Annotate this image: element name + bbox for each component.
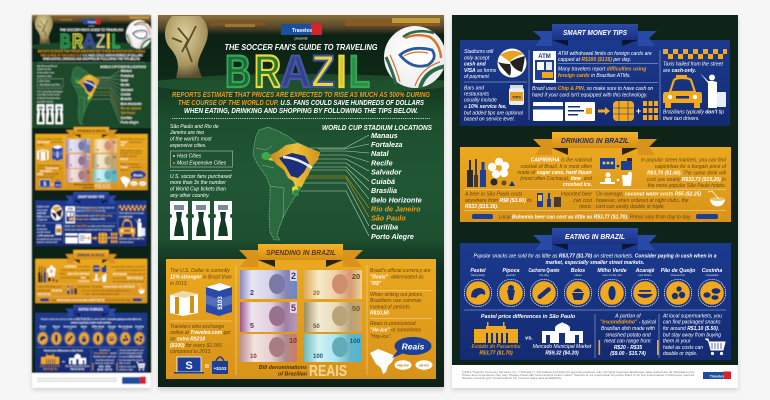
bill: 2 reais: 2 [291,271,296,281]
thumbnail: header [29,15,154,63]
text: service fee: usually include [464,98,497,104]
text: escondidinho: meat can range from: [604,338,652,344]
text: supermarkets: At local supermarkets, you [662,314,722,320]
text: reais facts: "Hay-ice". [370,334,392,340]
text: supermarkets: can find packaged snacks [663,320,721,326]
icon: Brazil silhouette with speech bubbles: He-Ice [419,364,429,368]
ribbon: eating heading [533,228,657,250]
text: beer prices: anywhere from R$8 ($3.60) to [465,198,532,204]
map: South America with Brazil flag [253,127,320,240]
text: ticket stat: any other country. [170,193,210,199]
text: pacaembu price: R$3,77 ($1.70) [479,350,513,356]
text: cash and visa: Stadiums will [464,49,494,55]
text: taxis cash only [663,62,723,74]
bill: 2 reais [240,270,297,299]
icon: tip jar: TIPS [512,94,521,100]
text: expensive cities: Janeiro are two [169,130,204,136]
title: BRAZIL: L [349,46,370,97]
text: service fee: Bars and [464,86,484,92]
text: beer prices: A beer in São Paulo costs [464,192,523,198]
icon: stadium ball [498,48,526,78]
text: dollar strength: in 2013. [170,281,188,287]
text: ticket stat: U.S. soccer fans purchased [170,174,232,180]
text: street market prices: the more popular São Paulo hotels. [648,183,726,189]
icon: laptop equals money bag: = [205,362,210,371]
labels: snack translations: cheese bun [671,273,686,277]
text: cash and visa: of payment. [464,74,490,80]
text: coconut water: cost can easily double or triple. [596,204,665,210]
ribbon: spending heading: SPENDING IN BRAZIL [266,250,336,257]
text: exchange online [170,324,231,355]
text: escondidinho: "escondidinho" - typical [600,320,657,326]
panel: right poster [452,15,738,388]
text: coconut water: however, when ordered at night clubs, the [596,198,689,204]
text: reais facts: instead of periods: [370,304,411,310]
bill: 50 reais: 50 [352,304,360,313]
text: supermarkets: double or triple. [663,351,697,357]
text: ATM tips: capped at R$300 ($135) per day. [558,57,631,63]
title: BRAZIL: B [225,46,251,97]
text: ticket stat: more than 3x the number [170,180,226,186]
text: cash and visa: only accept [464,56,490,62]
text: snacks intro: market, especially smaller street markets. [546,260,644,266]
thumbnail background [32,15,151,388]
logo: Travelex: presents [294,36,308,40]
bill: 5 reais: 5 [250,323,254,330]
stadium crowd band [151,15,451,94]
text: reais facts: Reais is pronounced [370,321,416,327]
intro text [172,90,430,115]
panel: drinking background [460,147,731,222]
list: stadium cities: Belo Horizonte [371,196,422,204]
labels: snack names: Coxinha [702,268,722,274]
caption: bill denominations [259,363,347,380]
text: dollar strength: 11% stronger in Brazil than [170,274,232,280]
labels: snack names: Pão de Queijo [661,268,695,274]
thumbnail: drinking [35,250,147,303]
intro text: REPORTS ESTIMATE THAT PRICES ARE EXPECTED TO RISE AS MUCH AS 500% DURING [172,90,430,99]
text: street market prices: cost you nearly R$33,73 ($15,20) in [647,177,726,183]
labels: snack names [470,268,722,274]
text: exchange online: online at Travelex.com get [170,330,231,336]
labels: snack names: Pastel [470,268,486,274]
chart heading: pastel price differences: Pastel price differences in São Paulo [481,314,576,320]
bill: 50 reais [304,302,362,332]
section: smart money tips [460,24,730,126]
text: reais facts: R$10,50 [370,310,389,316]
bill: 20 reais: 20 [352,272,360,281]
text: reais facts: "Reais", abbreviated as [370,274,424,280]
text: chip and pin [532,86,653,98]
text: service fee: based on service level. [464,116,515,122]
text: reais facts: When writing out prices, [370,292,423,298]
text: mercado price: R$9,32 ($4.20) [545,350,579,356]
text: ticket stat: of World Cup tickets than [170,186,226,192]
legend [170,151,232,167]
text: taxis cash only: Taxis hailed from the street [663,62,723,68]
labels: snack translations: corn on the cob [602,273,622,277]
labels: snack names: Acarajé [635,268,654,274]
icon: beer [537,193,561,207]
bill: 100 reais: 100 [350,338,361,345]
title: BRAZIL [225,46,370,97]
callout: Bohemia beer: Local Bohemia beer can cost as little as R$3,77 ($1.70). Prices vary from day to day. [499,214,691,220]
bill: 5 reais [240,302,297,332]
text: legal notice: ©2013 Travelex Currency Services, Inc. ("Travelex"). Information provided for general purposes only. All rights reserved. Exchange rates quoted are for illustration only. [462,371,696,374]
panel: spending background [166,259,436,379]
text: coconut water [596,192,701,210]
icon: money stacks [170,283,232,316]
text: exchange online: ($100) for every $1,000 [170,343,222,349]
bill: 10 reais: 10 [250,354,257,360]
text: cash and visa: VISA as forms [464,68,497,74]
list: stadium cities [371,131,422,241]
labels: snack translations: hot dog [539,273,549,277]
ribbon: money heading [533,24,657,46]
text: street market prices: R$3,70 ($1,68). The same drink will [647,170,727,176]
intro text: THE COURSE OF THE WORLD CUP. U.S. FANS COULD SAVE HUNDREDS OF DOLLARS [178,98,424,107]
bill: 20 reais [304,270,362,299]
text: escondidinho [600,314,657,357]
text: no tipping: their taxi drivers. [663,116,700,122]
title: BRAZIL: R [254,46,281,97]
text: dollar strength [170,268,232,287]
list: stadium cities: Curitiba [371,222,398,232]
icon: money stacks: $103 [218,296,224,310]
text: exchange online: compared to 2013. [170,349,212,355]
text: versus: vs. [525,336,533,342]
text: cash and visa: cash and [464,62,487,68]
caption: bill denominations: REAIS [309,363,347,380]
text: caipirinha [517,158,593,188]
icon: laptop equals money bag: +$103 [214,366,227,371]
icons: snack glyphs [471,285,720,300]
panel: money background [460,40,730,126]
title: BRAZIL: Z [311,46,335,97]
text: escondidinho: ($9.00 - $15.74) [610,351,646,357]
icon: market and hotel [600,158,632,186]
labels: snack translations: pea fritters [638,273,652,277]
text: escondidinho: R$20 - R$35 [614,345,642,351]
connector lines [300,135,369,236]
text: chip and pin: Brazil uses Chip & PIN, so make sure to have cash on [532,86,653,92]
list: stadium cities: Manaus [371,131,398,140]
icon: ATM: ATM [538,54,551,60]
icon: laptop equals money bag: S [185,360,193,372]
labels: snack names: Pipoca [502,268,520,274]
pattern: taxi checker [663,49,727,59]
text: caipirinha: (most often Cachaça), lime, and [520,176,592,182]
list: stadium cities: Cuiabá [371,177,395,186]
icon: Mercado Municipal [542,322,583,343]
caption: bill denominations: Bill denominations [259,365,307,371]
footer: right poster [462,371,731,380]
text: pacaembu price [472,344,521,356]
text: legal notice [462,371,696,380]
text: mercado price [533,344,592,356]
icon: Brazil silhouette with speech bubbles: Hay-Ice [397,364,409,368]
text: taxis cash only: are cash-only. [663,68,696,74]
icon: fork and knife [598,340,659,355]
labels: snack translations: cakes [574,273,582,277]
text: snacks intro: Popular snacks are sold for as little as R$3,77 ($1.70) on street markets. Consider paying in cash when in a [474,254,717,260]
text: service fee: restaurants [464,92,490,98]
text: street market prices: caipirinhas for a bargain price of [655,164,727,170]
bill: 100 reais [304,334,362,362]
text: caipirinha: CAIPIRINHA is the national [531,158,593,164]
text: imported beer: can cost [573,198,593,204]
text: reais facts: "He-Ice" or sometimes [370,328,422,334]
text: mercado price: Mercado Municipal Market [533,344,592,350]
icon: Brazil silhouette with speech bubbles: Reais [402,342,425,352]
text: ticket stat [170,174,232,199]
title: BRAZIL: A [280,46,311,97]
labels: snack translations: croquettes [705,273,719,277]
text: caipirinha: crushed ice. [563,182,592,188]
logo: Travelex [281,23,322,40]
labels: snack names: Milho Verde [597,268,627,274]
labels: snack translations: fried pastry [471,273,486,277]
icon: coconut [708,191,725,207]
text: caipirinha: made of sugar cane, hard liquor [517,170,593,176]
text: coconut water: On average, coconut water costs R$5 ($2.25) [596,192,701,198]
icon: three tickets [170,201,232,240]
text: reais facts: Brazil's official currency are [370,268,431,274]
caption: bill denominations: of Brazilian [278,372,308,378]
list: stadium cities: Natal [371,149,390,158]
bill: 50 reais: 50 [313,324,320,330]
list: stadium cities: Recife [371,158,393,168]
thumbnail: map [37,65,147,125]
list: stadium cities: Brasília [371,186,397,195]
icon: taxi and traveler [663,73,726,108]
text: expensive cities: expensive cities. [170,143,207,149]
logo: footer Travelex [703,372,731,379]
text: chip and pin: hand if your card isn't equipped with this technology. [532,92,647,98]
list: stadium cities: Fortaleza [371,140,403,149]
ribbon: drinking heading [533,132,657,155]
list: stadium cities: Salvador [371,168,403,176]
panel: thumbnail poster overview [29,15,154,388]
icon: World Cup trophy [165,16,208,78]
text: imported beer: Imported beer [561,192,592,198]
icons: snack discs [466,281,724,305]
ribbon: drinking heading: DRINKING IN BRAZIL [561,138,629,145]
list: stadium cities: Rio de Janeiro [371,204,421,214]
text: ATM tips [557,51,658,79]
thumbnail: footer logo [37,376,146,384]
bill: 20 reais: 20 [313,291,320,297]
text: no tipping: Brazilians typically don't tip [663,110,724,116]
title: BRAZIL: I [337,46,346,97]
section: spending in Brazil [166,244,436,380]
text: caipirinha: cocktail of Brazil. It is most often [521,164,592,170]
icon: bottles and flower [467,158,515,187]
list: stadium cities: São Paulo [371,214,406,222]
text: reais facts [370,268,432,340]
bill: 10 reais: 10 [289,338,297,345]
text: service fee: a 10% service fee, [464,104,507,110]
section: map and stadiums [169,123,432,241]
text: cash and visa [464,49,497,80]
text: expensive cities: São Paulo and Rio de [170,124,219,130]
icon: Pacaembu stadium [474,322,518,343]
text: beer prices: R$33 ($15.36). [465,204,498,210]
text: pacaembu price: Estádio do Pacaembu [472,344,521,350]
section: eating in Brazil [460,228,731,360]
panel: poster header [151,15,451,118]
text: escondidinho: Brazilian dish made with [601,326,655,332]
bill: 100 reais: 100 [313,354,324,360]
text: service fee: but added tips are optional [464,110,524,116]
text: no tipping [663,110,724,122]
text: ATM tips: ATM withdrawal limits on foreign cards are [557,51,652,57]
text: supermarkets: hotel as costs can [663,345,703,351]
bill: 5 reais: 5 [291,303,296,313]
labels: snack names: Cachorro-Quente [528,268,560,274]
icons: snack rings [464,279,726,307]
text: reais facts: Brazilians use commas [370,298,422,304]
icon: cards chip and keypad: + [636,106,641,116]
thumbnail: money tips [35,192,147,246]
text: snacks intro [474,254,717,266]
icon: cards chip and keypad [533,101,658,121]
section: drinking in Brazil [460,132,731,222]
text: exchange online: an extra R$218 [170,336,205,342]
text: dollar strength: The U.S. Dollar is currently [170,268,230,274]
text: imported beer: more. [579,204,592,210]
heading: stadium locations: WORLD CUP STADIUM LOCATIONS [322,123,432,132]
icon: shopping cart [705,339,725,355]
icon: soccer ball [384,26,446,88]
title line: THE SOCCER FAN'S GUIDE TO TRAVELING [224,43,378,52]
text: service fee [464,86,524,122]
icon: ATM [533,51,556,83]
labels: snack translations [471,273,719,277]
bill: 2 reais: 2 [250,290,254,297]
text: expensive cities [169,124,219,149]
text: street market prices: In popular street markets, you can find [641,158,726,164]
logo: footer Travelex: Travelex [710,374,724,378]
legend: Most Expensive Cities [177,160,227,166]
intro text: WHEN EATING, DRINKING AND SHOPPING BY FOLLOWING THE TIPS BELOW. [184,106,418,115]
text: street market prices [641,158,727,189]
text: exchange online: Travelers who exchange [170,324,224,330]
list: stadium cities: Porto Alegre [371,232,414,241]
text: supermarkets: them in your [663,338,691,344]
logo: Travelex: Travelex [292,28,312,34]
icon: Brazil silhouette with speech bubbles [370,337,432,374]
text: ATM tips: Many travelers report difficulties using [558,66,646,72]
labels: snack translations: popcorn [506,273,516,277]
text: ATM tips: foreign cards in Brazilian ATMs. [558,73,631,79]
text: legal notice: Prices and conversions may vary. Please check with local vendors before travel. Travelex is not responsible for prices listed or for any inaccuracies in third-party sources. [462,374,695,377]
ribbon: eating heading: EATING IN BRAZIL [565,232,625,241]
panel: centre poster [158,15,444,387]
thumbnail: spending [35,127,148,191]
text: reais facts: "R$". [370,281,383,287]
text: legal notice: Please consult your local branch for current rates and availability. [462,377,563,380]
text: supermarkets: for around R$1,10 ($.50), [663,326,719,332]
bill: 10 reais [240,334,297,362]
thumbnail: eating [35,305,147,373]
text: escondidinho: smashed potato and [605,332,651,338]
legend: Host Cities [177,154,202,160]
icon: tip jar [509,85,524,105]
text: escondidinho: A portion of [614,314,641,320]
text: imported beer [561,192,593,210]
text: supermarkets: but stay away from buying [663,332,721,338]
panel: eating background [460,243,731,360]
text: supermarkets [662,314,722,357]
labels: snack names: Bolos [571,268,585,274]
text: beer prices [464,192,532,210]
text: expensive cities: of the world's most [170,136,212,142]
ribbon: money heading: SMART MONEY TIPS [563,28,627,37]
icon: laptop equals money bag [174,357,228,374]
ribbon: spending heading [239,244,363,267]
